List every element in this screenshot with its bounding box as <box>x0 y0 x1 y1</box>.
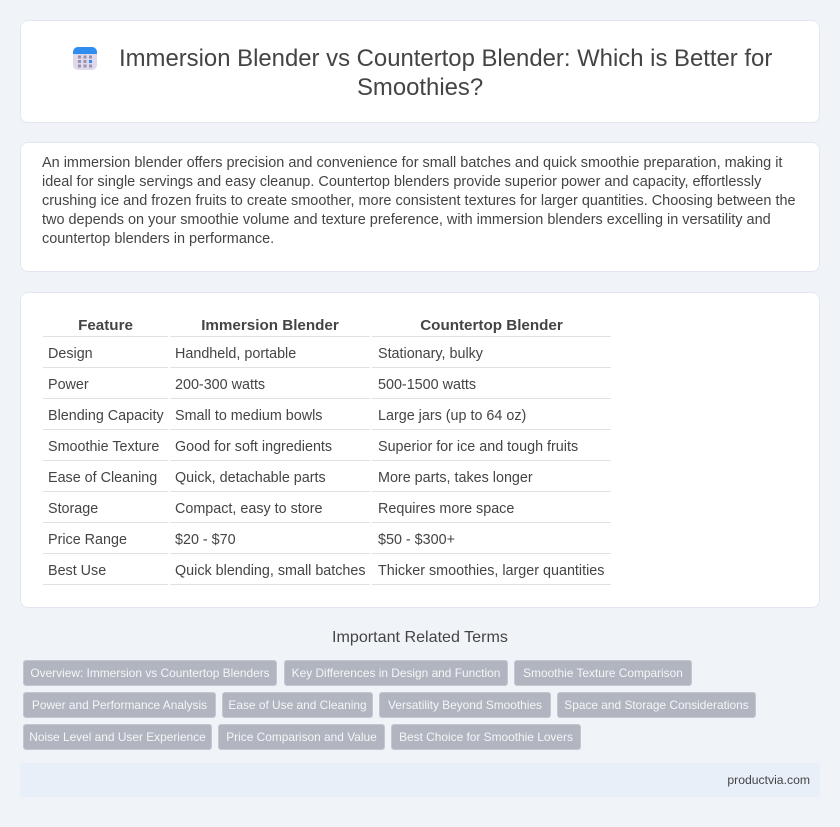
comparison table: Power <box>48 377 89 393</box>
comparison table: Best Use <box>48 563 106 579</box>
footer credit: productvia.com <box>727 773 810 787</box>
icon: calendar <box>73 47 97 70</box>
comparison table: Superior for ice and tough fruits <box>378 439 578 455</box>
tag list: Key Differences in Design and Function <box>292 666 500 680</box>
comparison table: Thicker smoothies, larger quantities <box>378 563 604 579</box>
comparison table <box>43 317 611 585</box>
tag list <box>23 660 756 750</box>
comparison table: Quick blending, small batches <box>175 563 366 579</box>
text block: intro paragraph: countertop blenders in performance. <box>42 231 274 247</box>
comparison table: Quick, detachable parts <box>175 470 326 486</box>
text block: intro paragraph: ideal for single servings and easy cleanup. Countertop blenders provide superior power and capacity, effortlessly <box>42 174 761 190</box>
comparison table: Price Range <box>48 532 127 548</box>
comparison table: Large jars (up to 64 oz) <box>378 408 526 424</box>
title <box>119 45 772 101</box>
tag list: Overview: Immersion vs Countertop Blenders <box>30 666 270 680</box>
comparison table: $50 - $300+ <box>378 532 455 548</box>
title: Smoothies? <box>357 74 483 101</box>
footer bar <box>20 763 820 797</box>
tag list: Versatility Beyond Smoothies <box>388 698 542 712</box>
text block: intro paragraph: An immersion blender offers precision and convenience for small batches and quick smoothie preparation, making it <box>42 155 782 171</box>
table header <box>43 317 611 585</box>
heading: important related terms: Important Related Terms <box>332 628 508 646</box>
comparison table: Storage <box>48 501 98 517</box>
panel: intro card <box>20 142 820 272</box>
tag list: Noise Level and User Experience <box>29 730 206 744</box>
comparison table: Requires more space <box>378 501 514 517</box>
table header: Countertop Blender <box>420 317 563 334</box>
comparison table: Design <box>48 346 93 362</box>
panel: title card <box>20 20 820 123</box>
comparison table: Stationary, bulky <box>378 346 483 362</box>
text block: intro paragraph: two depends on your smoothie volume and texture preference, with immersion blenders excelling in versatility and <box>42 212 771 228</box>
tag list: Price Comparison and Value <box>226 730 377 744</box>
tag list: Power and Performance Analysis <box>32 698 207 712</box>
table header: Feature <box>78 317 133 334</box>
panel: comparison table card <box>20 292 820 608</box>
tag list: Space and Storage Considerations <box>564 698 749 712</box>
comparison table: Good for soft ingredients <box>175 439 332 455</box>
comparison table: Handheld, portable <box>175 346 296 362</box>
comparison table: 200-300 watts <box>175 377 265 393</box>
comparison table: More parts, takes longer <box>378 470 533 486</box>
text block: intro paragraph <box>42 155 796 247</box>
comparison table: Blending Capacity <box>48 408 164 424</box>
table header: Immersion Blender <box>201 317 339 334</box>
comparison table: Compact, easy to store <box>175 501 322 517</box>
comparison table: Small to medium bowls <box>175 408 322 424</box>
tag list: Best Choice for Smoothie Lovers <box>399 730 573 744</box>
comparison table: Ease of Cleaning <box>48 470 157 486</box>
tag list: Ease of Use and Cleaning <box>228 698 367 712</box>
title: Immersion Blender vs Countertop Blender: Which is Better for <box>119 45 772 72</box>
comparison table: Smoothie Texture <box>48 439 159 455</box>
text block: intro paragraph: crushing ice and frozen fruits to create smoother, more consistent textures for larger quantities. Choosing between the <box>42 193 796 209</box>
tag list: Smoothie Texture Comparison <box>523 666 683 680</box>
comparison table: 500-1500 watts <box>378 377 476 393</box>
comparison table: $20 - $70 <box>175 532 236 548</box>
